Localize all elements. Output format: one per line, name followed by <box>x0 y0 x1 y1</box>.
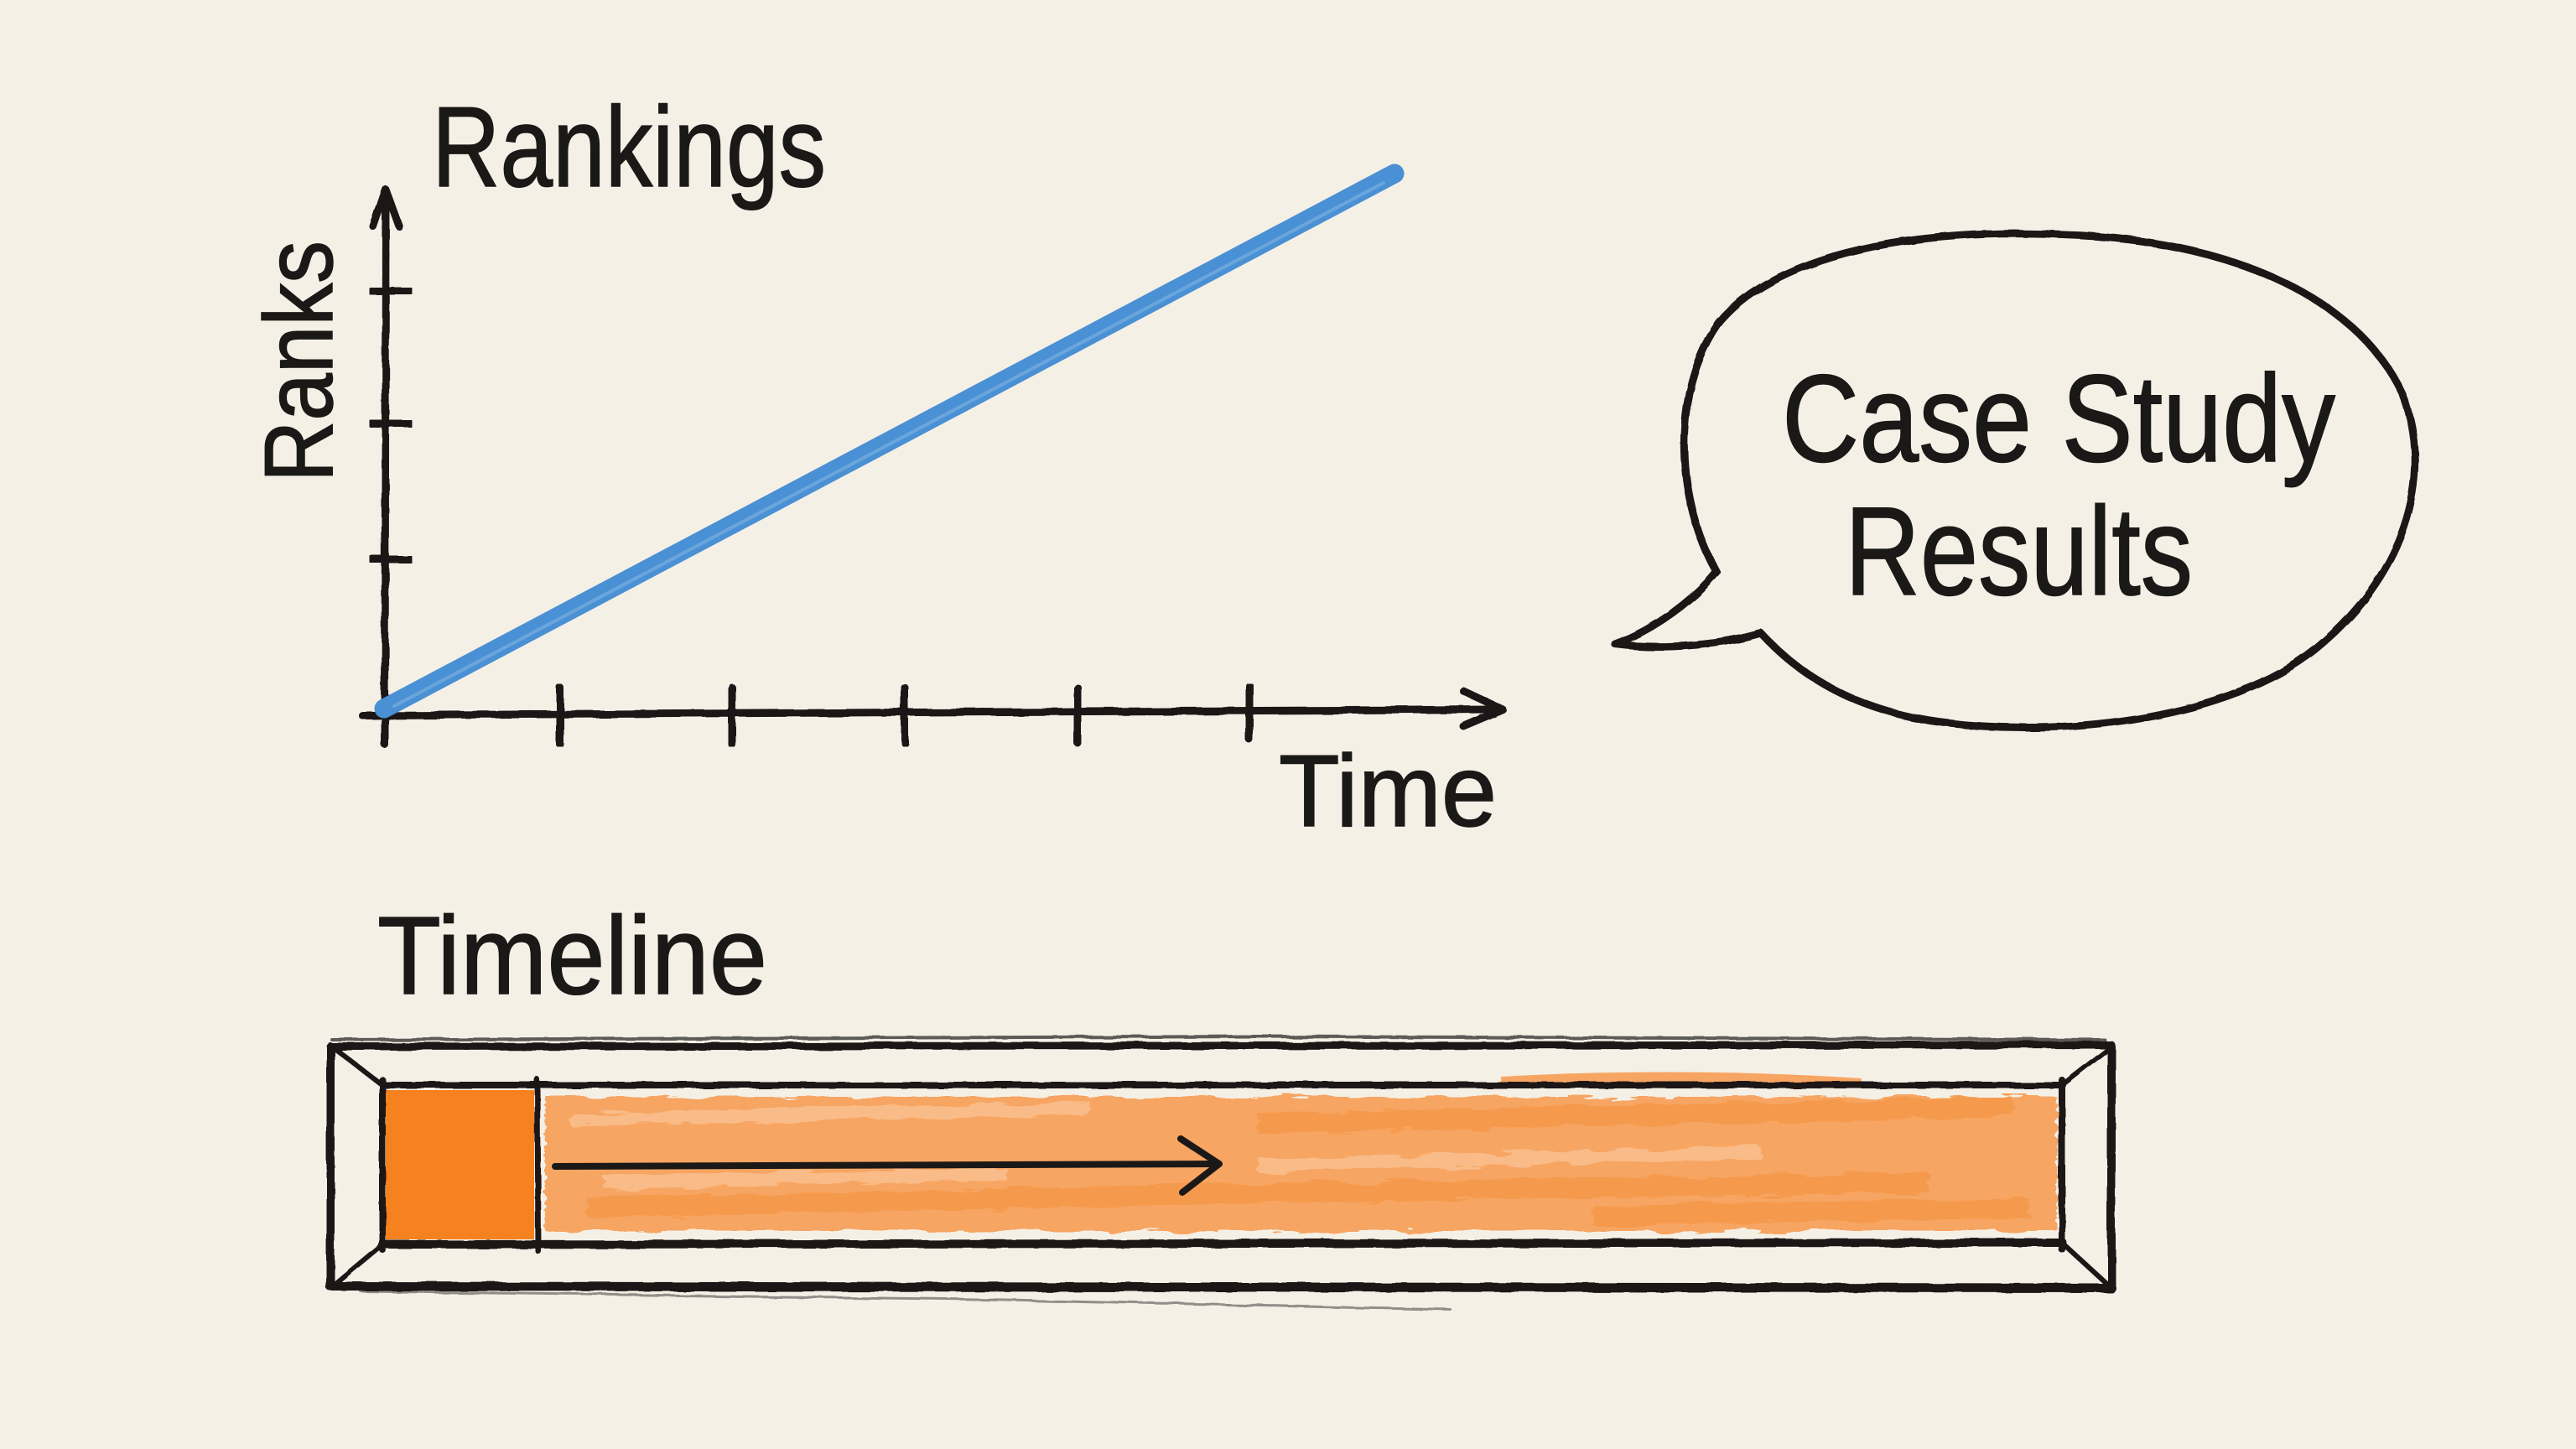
chart title: Rankings: Rankings <box>432 83 826 210</box>
blue rankings trend line <box>384 174 1394 709</box>
bubble outline <box>1615 234 2415 728</box>
x axis with arrow and ticks <box>362 686 1503 745</box>
bubble text line 2: Results <box>1845 480 2193 621</box>
dark orange completed segment <box>386 1090 534 1239</box>
light orange remaining segment <box>545 1097 2057 1231</box>
panel: rankings line chart <box>244 83 1503 848</box>
panel: timeline progress bar <box>330 894 2111 1310</box>
timeline heading: Timeline <box>377 894 767 1017</box>
progress arrow <box>555 1139 1219 1192</box>
y axis with arrow and ticks <box>371 190 411 745</box>
orange overshoot at top of bar <box>1501 1072 1862 1085</box>
x axis label: Time: Time <box>1279 734 1497 848</box>
y axis label: Ranks: Ranks <box>244 241 353 482</box>
bar frame <box>330 1036 2111 1310</box>
speech bubble: case study results <box>1615 234 2415 728</box>
bubble text line 1: Case Study <box>1782 350 2335 488</box>
